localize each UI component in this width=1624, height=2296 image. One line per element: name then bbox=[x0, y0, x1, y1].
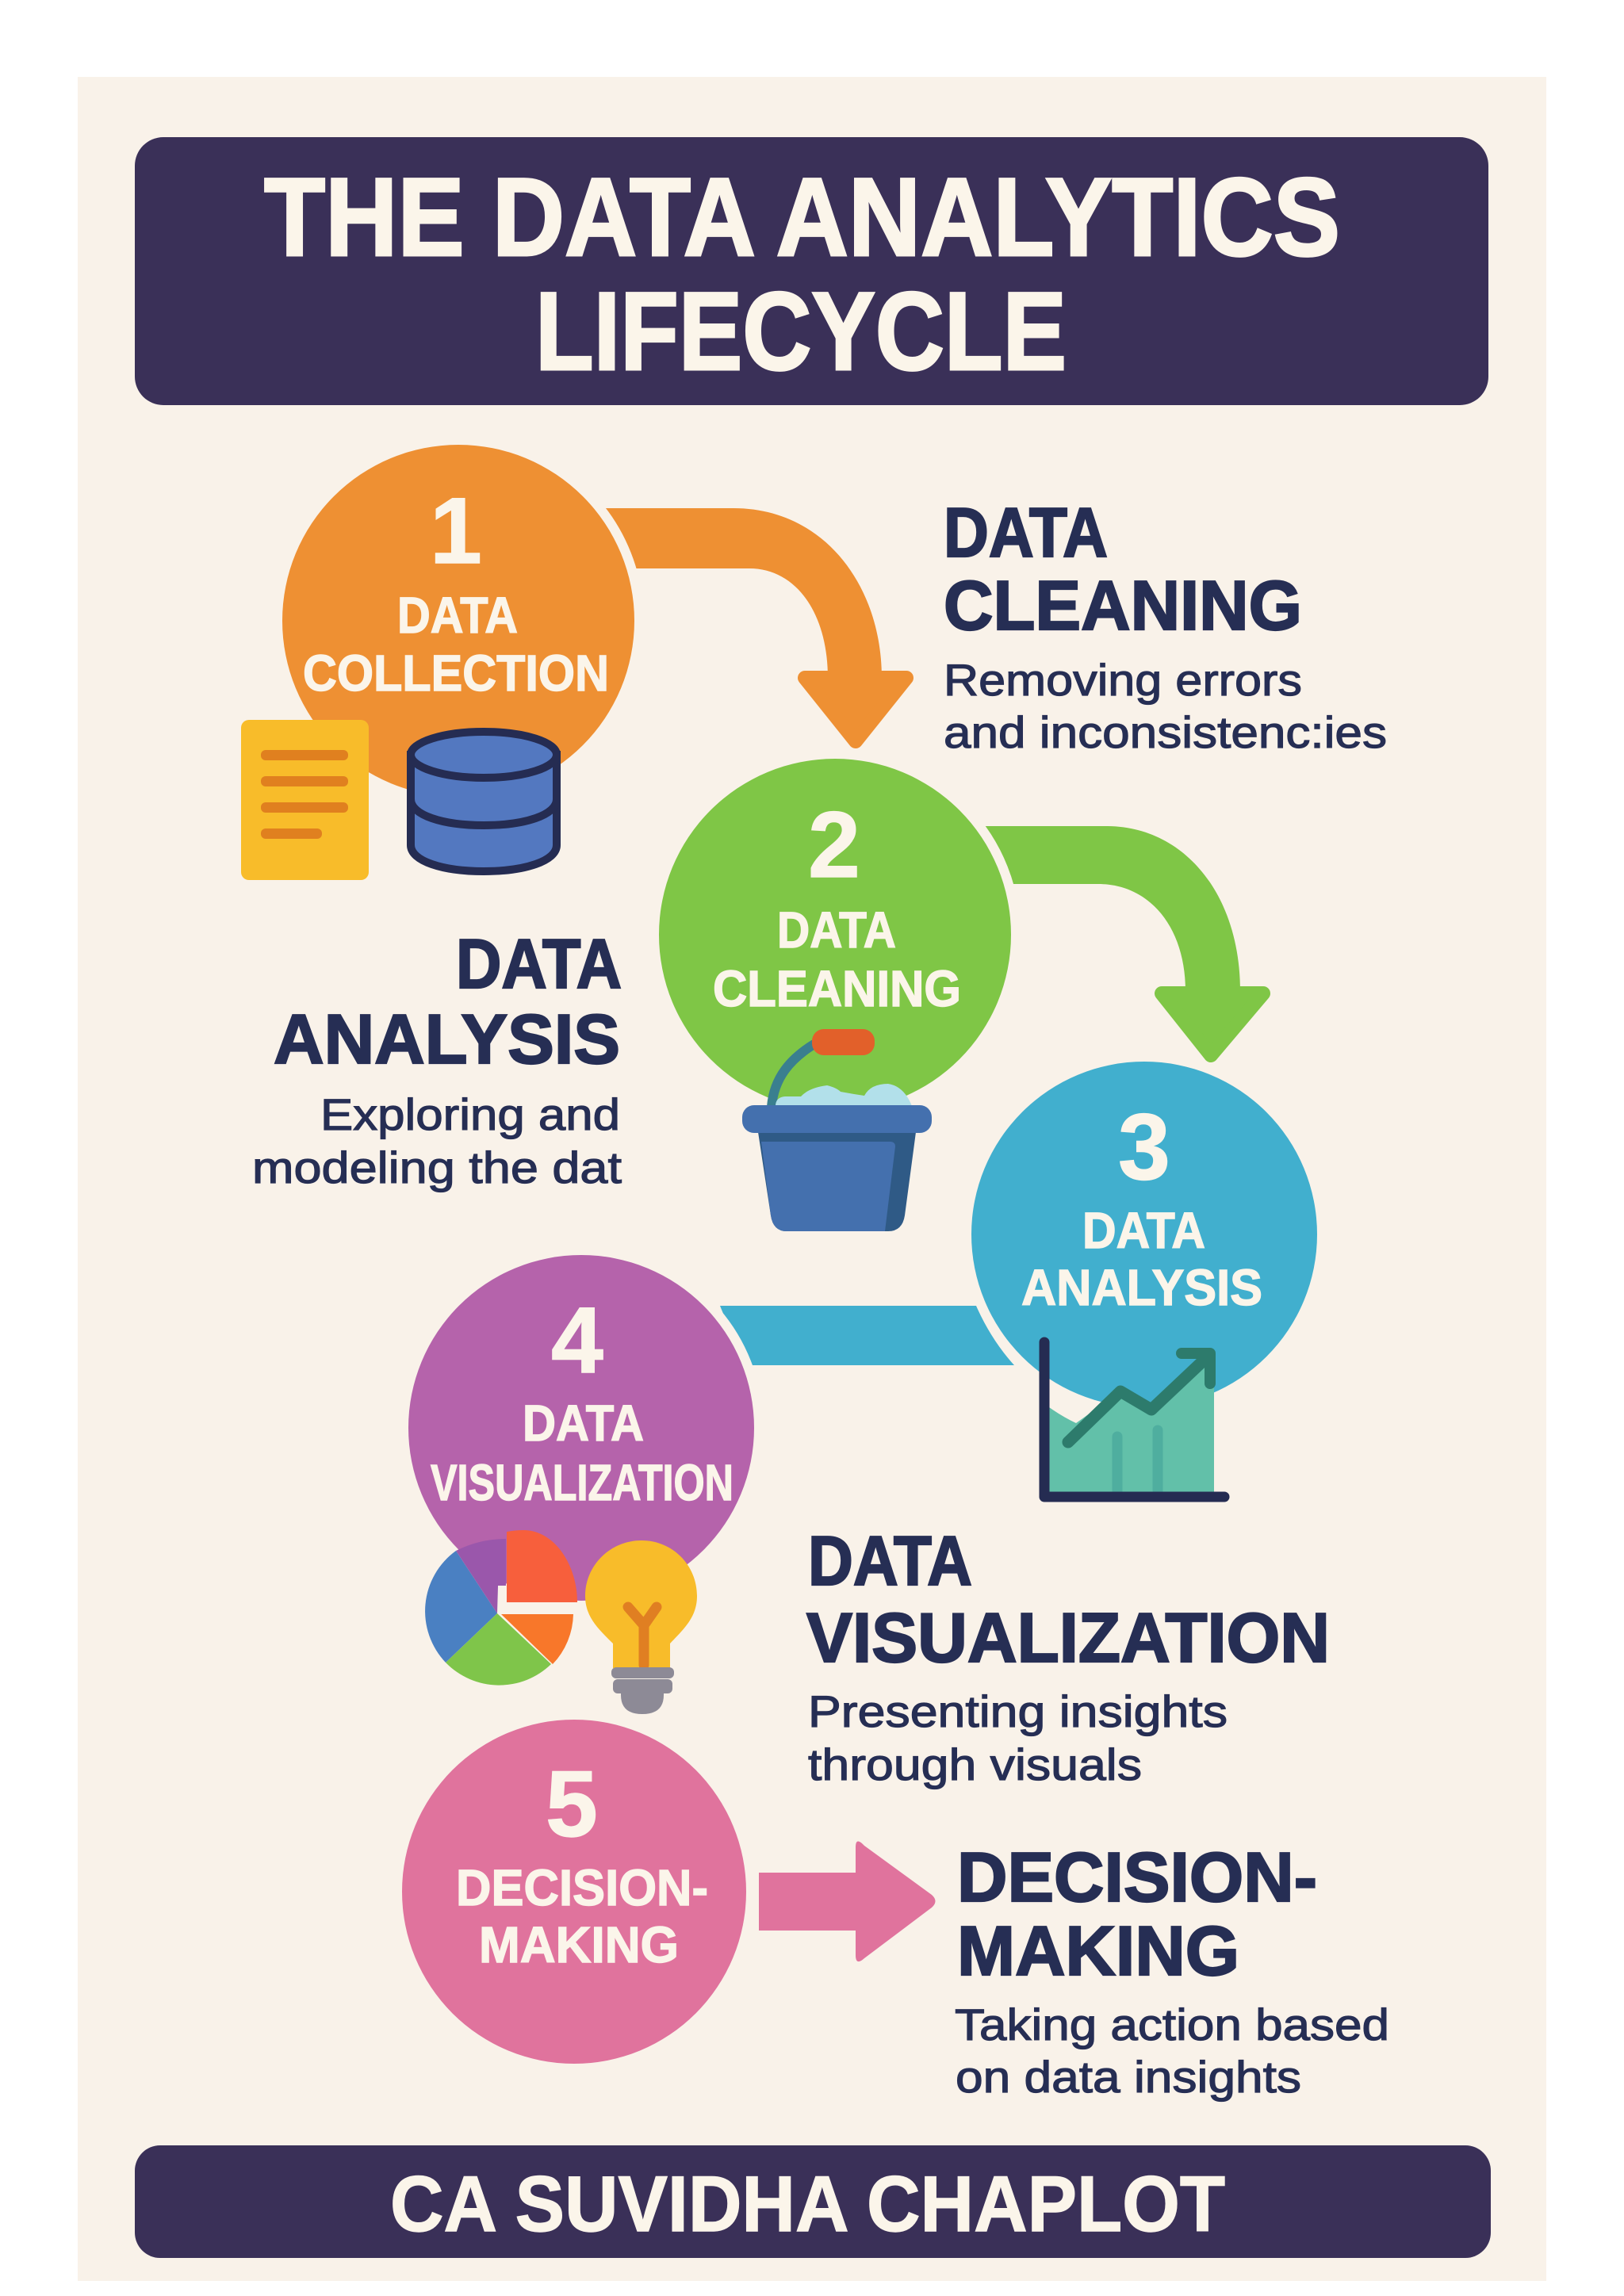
description: data visualization: Presenting insights bbox=[808, 1686, 1228, 1736]
step 4 circle: data visualization: DATA bbox=[523, 1395, 644, 1452]
description: decision-making: DECISION- bbox=[957, 1838, 1317, 1916]
description: decision-making: on data insights bbox=[956, 2052, 1301, 2102]
step 4 circle: data visualization: VISUALIZATION bbox=[431, 1454, 733, 1511]
description: data analysis: modeling the dat bbox=[252, 1142, 622, 1192]
description: data visualization: through visuals bbox=[808, 1739, 1142, 1789]
title banner bbox=[135, 137, 1488, 405]
description: decision-making bbox=[955, 1838, 1389, 2102]
step 3 circle: data analysis: ANALYSIS bbox=[1021, 1259, 1262, 1316]
step 5 circle: decision-making: DECISION- bbox=[456, 1859, 708, 1916]
description: data cleaning: DATA bbox=[944, 493, 1108, 572]
footer banner bbox=[135, 2145, 1491, 2258]
footer banner: CA SUVIDHA CHAPLOT bbox=[390, 2160, 1225, 2248]
step 3 circle: data analysis bbox=[971, 1062, 1317, 1407]
description: data analysis: DATA bbox=[456, 924, 622, 1003]
step 1 circle: data collection: COLLECTION bbox=[303, 645, 609, 702]
icon: document bbox=[241, 720, 369, 880]
description: data cleaning: and inconsistenc:ies bbox=[944, 707, 1387, 757]
icon: database bbox=[411, 732, 557, 871]
description: data cleaning: Removing errors bbox=[944, 655, 1302, 705]
description: decision-making: Taking action based bbox=[955, 1999, 1389, 2049]
step 1 circle: data collection bbox=[282, 445, 634, 797]
step 4 circle: data visualization bbox=[408, 1255, 754, 1601]
step 3 circle: data analysis: 3 bbox=[1118, 1095, 1170, 1200]
description: data cleaning bbox=[944, 493, 1387, 757]
icon: bucket with foam bbox=[742, 1029, 932, 1231]
step 2 circle: data cleaning: 2 bbox=[808, 793, 860, 897]
arrow: step 3 to step 4 connector band bbox=[720, 1306, 1014, 1365]
title banner: THE DATA ANALYTICS bbox=[264, 155, 1340, 279]
description: data analysis: ANALYSIS bbox=[274, 1000, 620, 1078]
description: data analysis bbox=[252, 924, 622, 1192]
description: decision-making: MAKING bbox=[957, 1911, 1239, 1990]
icon: light bulb bbox=[585, 1540, 697, 1714]
step 2 circle: data cleaning: CLEANING bbox=[713, 960, 961, 1017]
step 3 circle: data analysis: DATA bbox=[1082, 1202, 1205, 1259]
description: data cleaning: CLEANING bbox=[944, 566, 1302, 645]
step 2 circle: data cleaning bbox=[659, 759, 1011, 1111]
arrow: step 1 to step 2 bbox=[587, 508, 906, 741]
title banner: LIFECYCLE bbox=[535, 269, 1067, 393]
description: data analysis: Exploring and bbox=[320, 1089, 620, 1139]
icon: pie chart bbox=[425, 1530, 585, 1686]
step 1 circle: data collection: DATA bbox=[397, 587, 518, 644]
description: data visualization: VISUALIZATION bbox=[806, 1598, 1330, 1677]
step 4 circle: data visualization: 4 bbox=[551, 1288, 603, 1393]
description: data visualization bbox=[806, 1521, 1330, 1789]
step 5 circle: decision-making bbox=[402, 1720, 746, 2064]
icon: growth chart bbox=[1044, 1342, 1224, 1497]
arrow: step 5 to decision-making bbox=[759, 1841, 936, 1961]
arrow: step 2 to step 3 bbox=[975, 826, 1263, 1055]
step 1 circle: data collection: 1 bbox=[430, 479, 482, 584]
description: data visualization: DATA bbox=[808, 1521, 972, 1600]
step 5 circle: decision-making: 5 bbox=[546, 1752, 598, 1857]
step 2 circle: data cleaning: DATA bbox=[777, 901, 896, 959]
step 5 circle: decision-making: MAKING bbox=[479, 1916, 679, 1973]
